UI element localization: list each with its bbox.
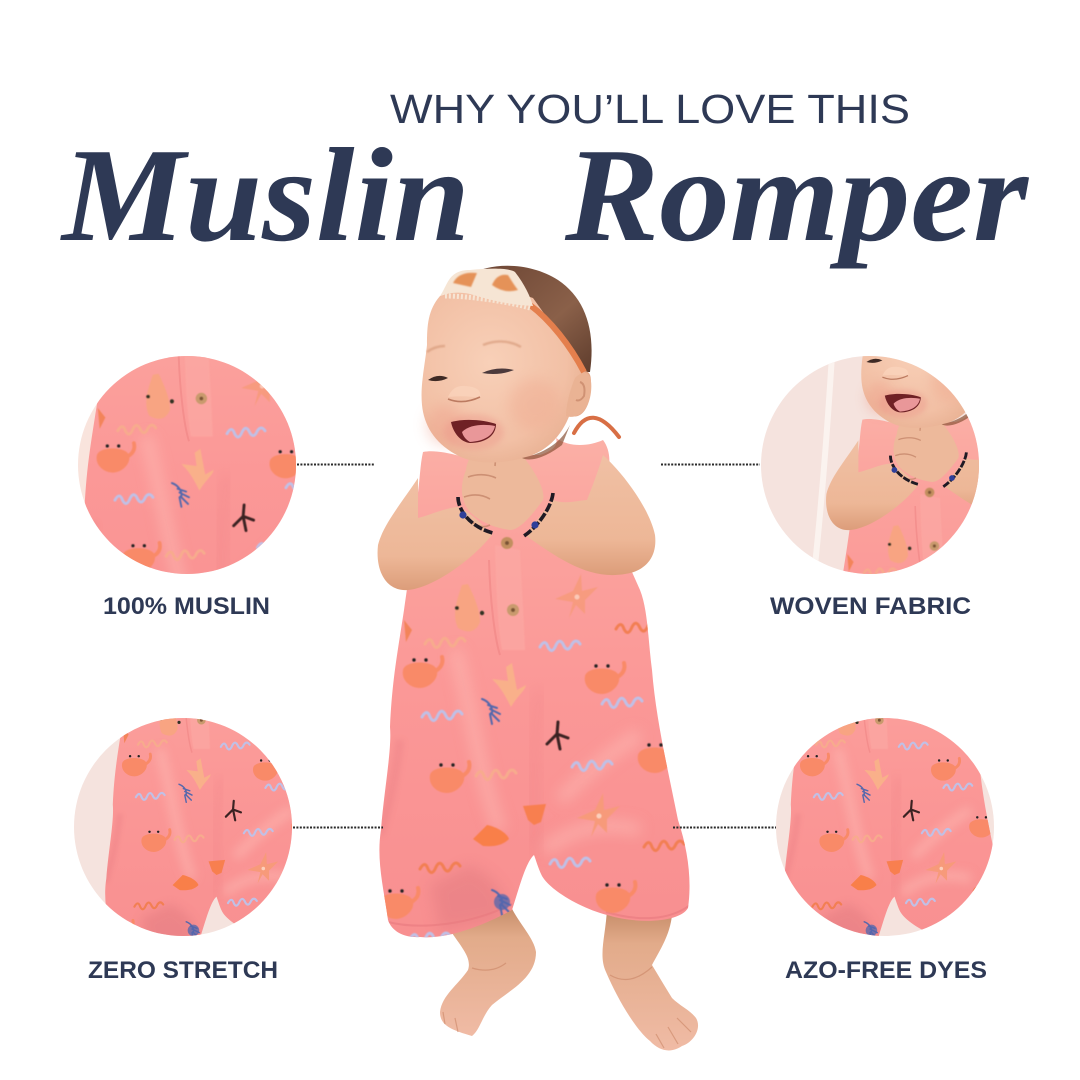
- label: 100% muslin: 100% MUSLIN: [103, 593, 270, 620]
- connector: bottom right: [673, 826, 776, 828]
- title: Muslin: Muslin: [60, 121, 470, 269]
- circle: 100% muslin: [78, 356, 296, 574]
- baby wearing romper: [378, 266, 698, 1050]
- circle: woven fabric: [761, 356, 979, 574]
- label: azo-free dyes: AZO-FREE DYES: [785, 957, 987, 984]
- title: Romper: Romper: [564, 121, 1030, 269]
- connector: bottom left: [293, 826, 383, 828]
- label: zero stretch: ZERO STRETCH: [88, 957, 278, 984]
- label: woven fabric: WOVEN FABRIC: [770, 593, 971, 620]
- circle: azo-free dyes: [776, 718, 994, 936]
- circle: zero stretch: [74, 718, 292, 936]
- title: eyebrow line: WHY YOU’LL LOVE THIS: [390, 86, 910, 132]
- connector: top left: [297, 464, 375, 466]
- connector: top right: [661, 464, 760, 466]
